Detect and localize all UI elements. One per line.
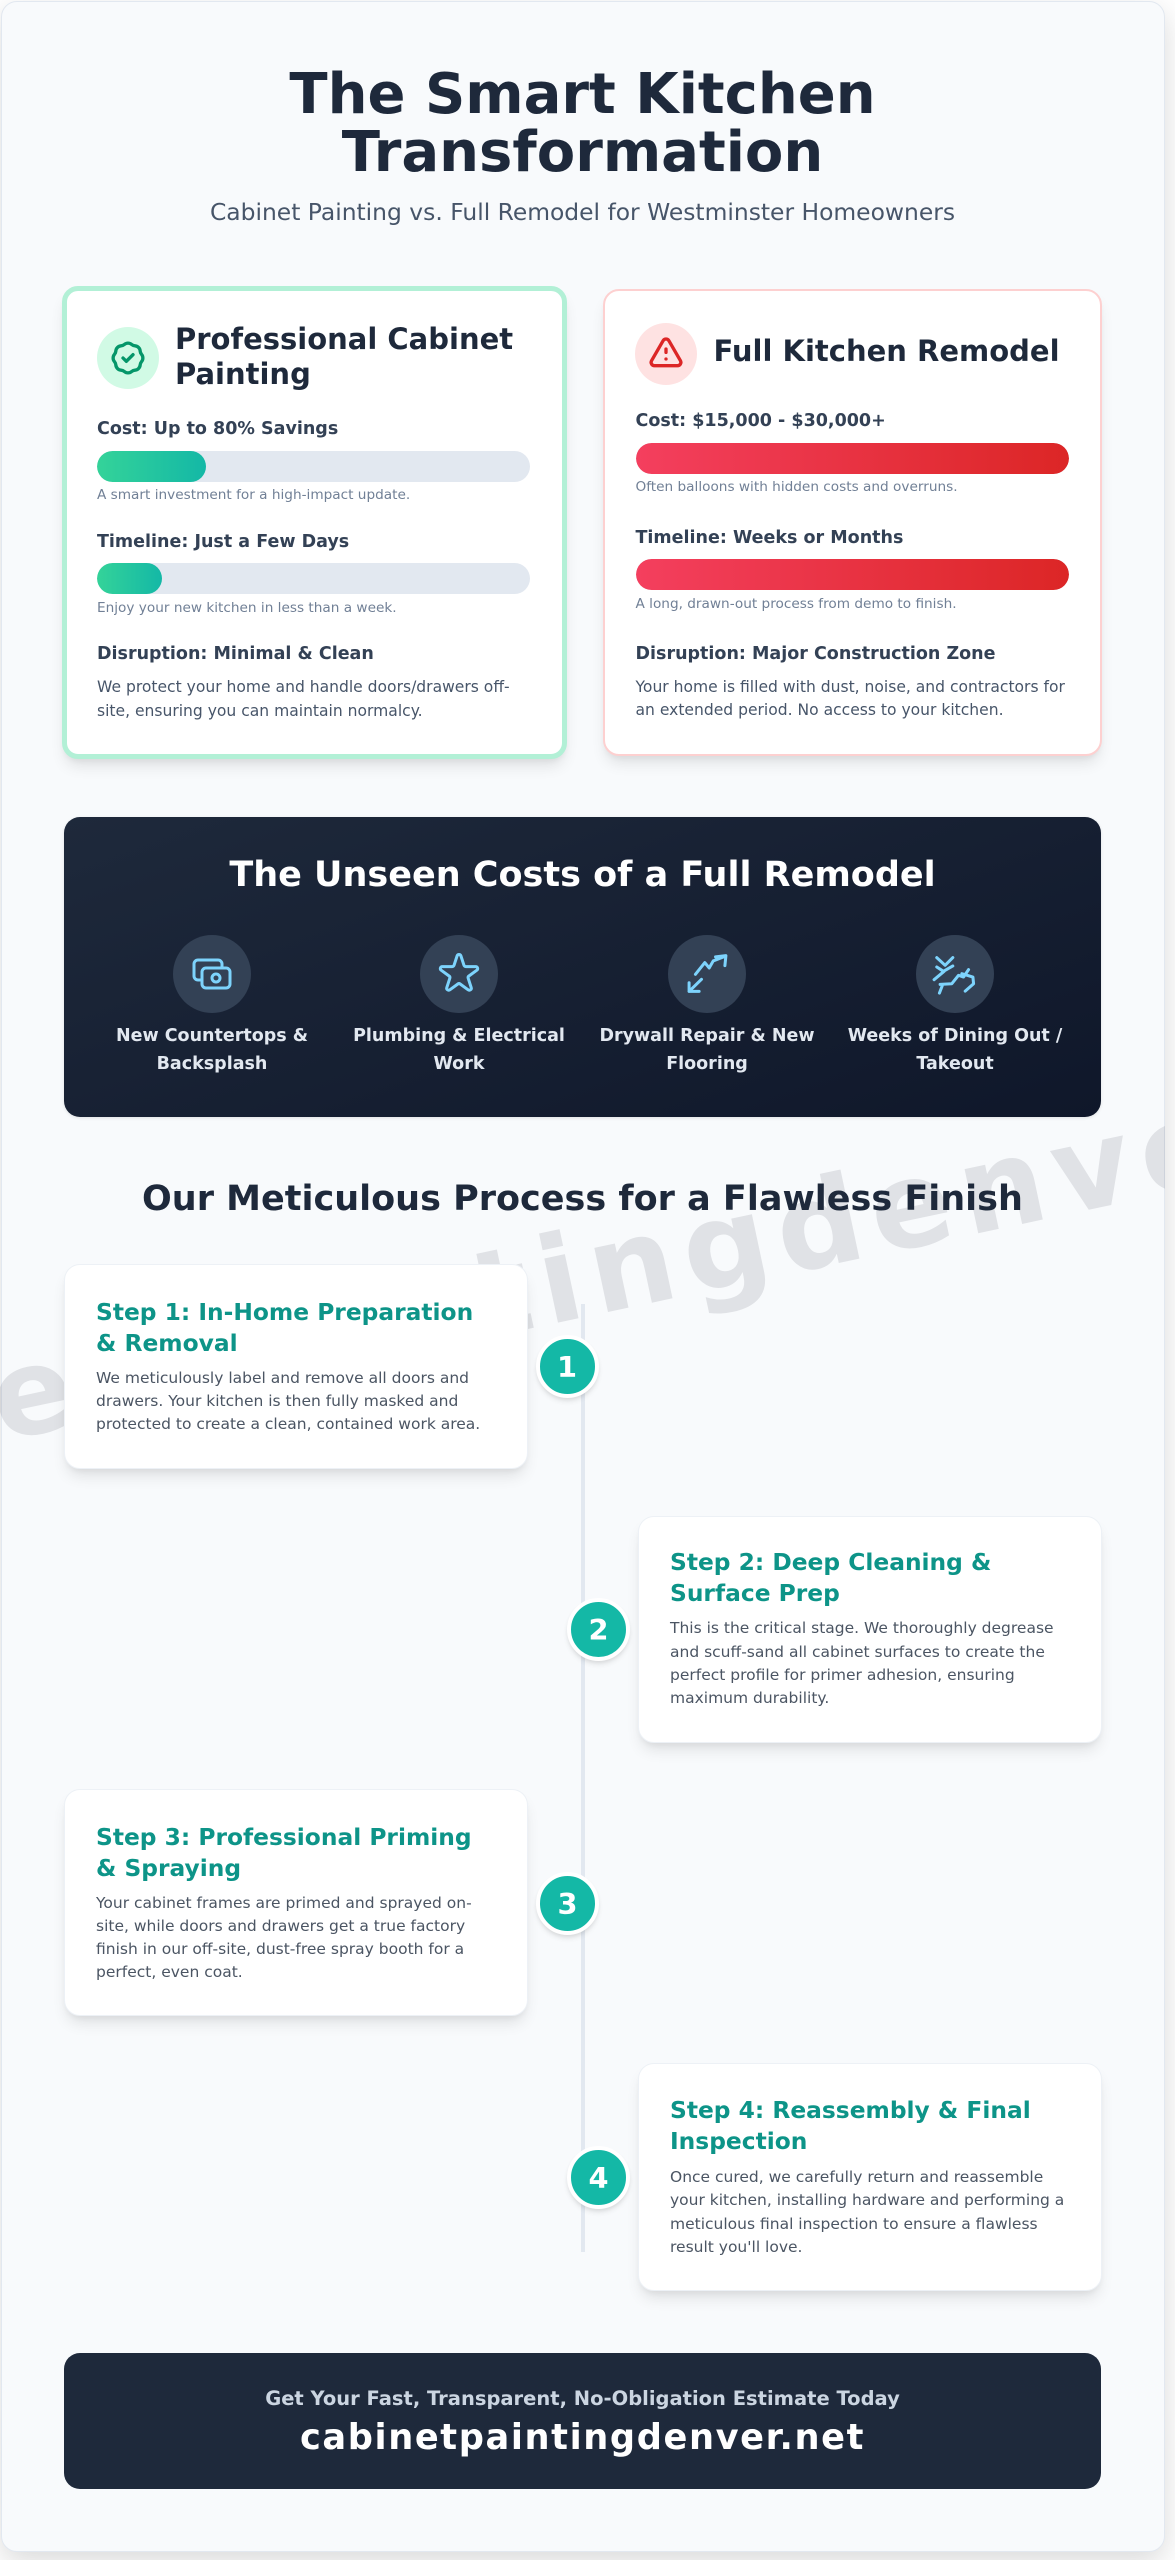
item label [599, 1026, 815, 1074]
step 3 card [64, 1789, 528, 2016]
step 1 badge: 1 [557, 1350, 577, 1384]
item label: Weeks of Dining Out / [848, 1026, 1062, 1046]
disruption text: an extended period. No access to your kitchen. [636, 701, 1004, 719]
card heading [175, 322, 513, 390]
card heading: Full Kitchen Remodel [714, 334, 1060, 368]
disruption text: site, ensuring you can maintain normalcy. [97, 702, 423, 720]
cta url: cabinetpaintingdenver.net [300, 2416, 865, 2458]
timeline label: Timeline: Just a Few Days [97, 532, 349, 552]
cost label: Cost: $15,000 - $30,000+ [636, 411, 886, 431]
panel: professional cabinet painting [62, 286, 567, 759]
cost note: Often balloons with hidden costs and overruns. [636, 479, 958, 495]
step text: and scuff-sand all cabinet surfaces to create the [670, 1643, 1045, 1661]
icon: star [420, 935, 498, 1013]
step text: perfect, even coat. [96, 1963, 243, 1981]
step heading: Inspection [670, 2127, 807, 2155]
panel heading: The Unseen Costs of a Full Remodel [229, 855, 936, 895]
step heading: Step 4: Reassembly & Final [670, 2096, 1031, 2124]
step text [96, 1369, 480, 1433]
step 4 badge [567, 2146, 630, 2209]
step heading [670, 1548, 991, 1607]
disruption text: Your home is filled with dust, noise, and contractors for [636, 678, 1065, 696]
item label: Backsplash [157, 1054, 267, 1074]
step 2 card [638, 1516, 1102, 1743]
icon: warning triangle [635, 323, 697, 385]
item label: Plumbing & Electrical [353, 1026, 565, 1046]
item label: Drywall Repair & New [599, 1026, 815, 1046]
step text [96, 1894, 472, 1981]
timeline bar [97, 563, 530, 594]
timeline line [581, 1304, 585, 2252]
title: The Smart Kitchen [289, 62, 876, 126]
cost bar [97, 451, 530, 482]
card heading: Professional Cabinet [175, 322, 513, 356]
item label: Flooring [666, 1054, 748, 1074]
cost item: drywall [599, 935, 815, 1074]
step text: This is the critical stage. We thoroughly degrease [670, 1619, 1054, 1637]
title: Transformation [342, 120, 823, 184]
step heading: Step 2: Deep Cleaning & [670, 1548, 991, 1576]
disruption text [97, 678, 510, 720]
step 3 badge [536, 1872, 599, 1935]
timeline bar [636, 559, 1068, 590]
step text: protected to create a clean, contained work area. [96, 1415, 480, 1433]
cost item: dining [848, 935, 1062, 1074]
timeline note: A long, drawn-out process from demo to finish. [636, 596, 957, 612]
disruption label: Disruption: Major Construction Zone [636, 644, 996, 664]
step text [670, 1619, 1054, 1707]
step heading: & Removal [96, 1328, 238, 1356]
cta text: Get Your Fast, Transparent, No-Obligation Estimate Today [265, 2387, 900, 2410]
item label: Takeout [916, 1054, 994, 1074]
item label [848, 1026, 1062, 1074]
timeline note: Enjoy your new kitchen in less than a week. [97, 600, 397, 616]
item label: New Countertops & [116, 1026, 308, 1046]
step text: site, while doors and drawers get a true factory [96, 1917, 465, 1935]
step text: We meticulously label and remove all doors and [96, 1369, 469, 1387]
panel: full kitchen remodel [602, 289, 1102, 756]
process heading: Our Meticulous Process for a Flawless Finish [142, 1178, 1023, 1218]
disruption text: We protect your home and handle doors/drawers off- [97, 678, 510, 696]
cost bar [636, 443, 1068, 474]
step 3 badge: 3 [557, 1886, 578, 1920]
card heading: Painting [175, 356, 311, 390]
step text: Once cured, we carefully return and reassemble [670, 2168, 1043, 2186]
step 1 badge [536, 1335, 598, 1398]
step 2 badge [567, 1598, 630, 1661]
title [289, 62, 876, 184]
icon: arrows [668, 935, 746, 1013]
item label: Work [434, 1054, 484, 1074]
item label [116, 1026, 308, 1074]
step heading [96, 1822, 472, 1882]
cost note: A smart investment for a high-impact update. [97, 487, 410, 503]
step text: meticulous final inspection to ensure a flawless [670, 2215, 1038, 2233]
step heading: Step 3: Professional Priming [96, 1822, 472, 1850]
step text: Your cabinet frames are primed and sprayed on- [96, 1894, 472, 1912]
cost label: Cost: Up to 80% Savings [97, 419, 338, 439]
step text: finish in our off-site, dust-free spray booth for a [96, 1940, 464, 1958]
subtitle: Cabinet Painting vs. Full Remodel for Westminster Homeowners [210, 198, 955, 226]
icon: utensils [916, 935, 994, 1013]
call to action [64, 2353, 1101, 2489]
panel: unseen costs [64, 817, 1101, 1117]
step heading: Surface Prep [670, 1579, 840, 1607]
cost item: countertops [116, 935, 308, 1074]
disruption text [636, 678, 1065, 719]
step text: maximum durability. [670, 1689, 829, 1707]
step heading: Step 1: In-Home Preparation [96, 1298, 473, 1326]
step heading [96, 1298, 473, 1356]
step text: result you'll love. [670, 2238, 802, 2256]
item label [353, 1026, 565, 1074]
step text: drawers. Your kitchen is then fully masked and [96, 1392, 458, 1410]
icon: cash [173, 935, 251, 1013]
cost item: plumbing [353, 935, 565, 1074]
step text: perfect profile for primer adhesion, ensuring [670, 1666, 1015, 1684]
step text: your kitchen, installing hardware and performing a [670, 2191, 1064, 2209]
step 2 badge: 2 [588, 1612, 609, 1646]
step 1 card [64, 1264, 528, 1469]
timeline label: Timeline: Weeks or Months [636, 528, 903, 548]
step 4 badge: 4 [588, 2160, 609, 2194]
icon: badge check [97, 327, 159, 389]
disruption label: Disruption: Minimal & Clean [97, 644, 374, 664]
step text [670, 2168, 1064, 2256]
step 4 card [638, 2063, 1102, 2291]
step heading: & Spraying [96, 1854, 241, 1882]
step heading [670, 2096, 1031, 2155]
